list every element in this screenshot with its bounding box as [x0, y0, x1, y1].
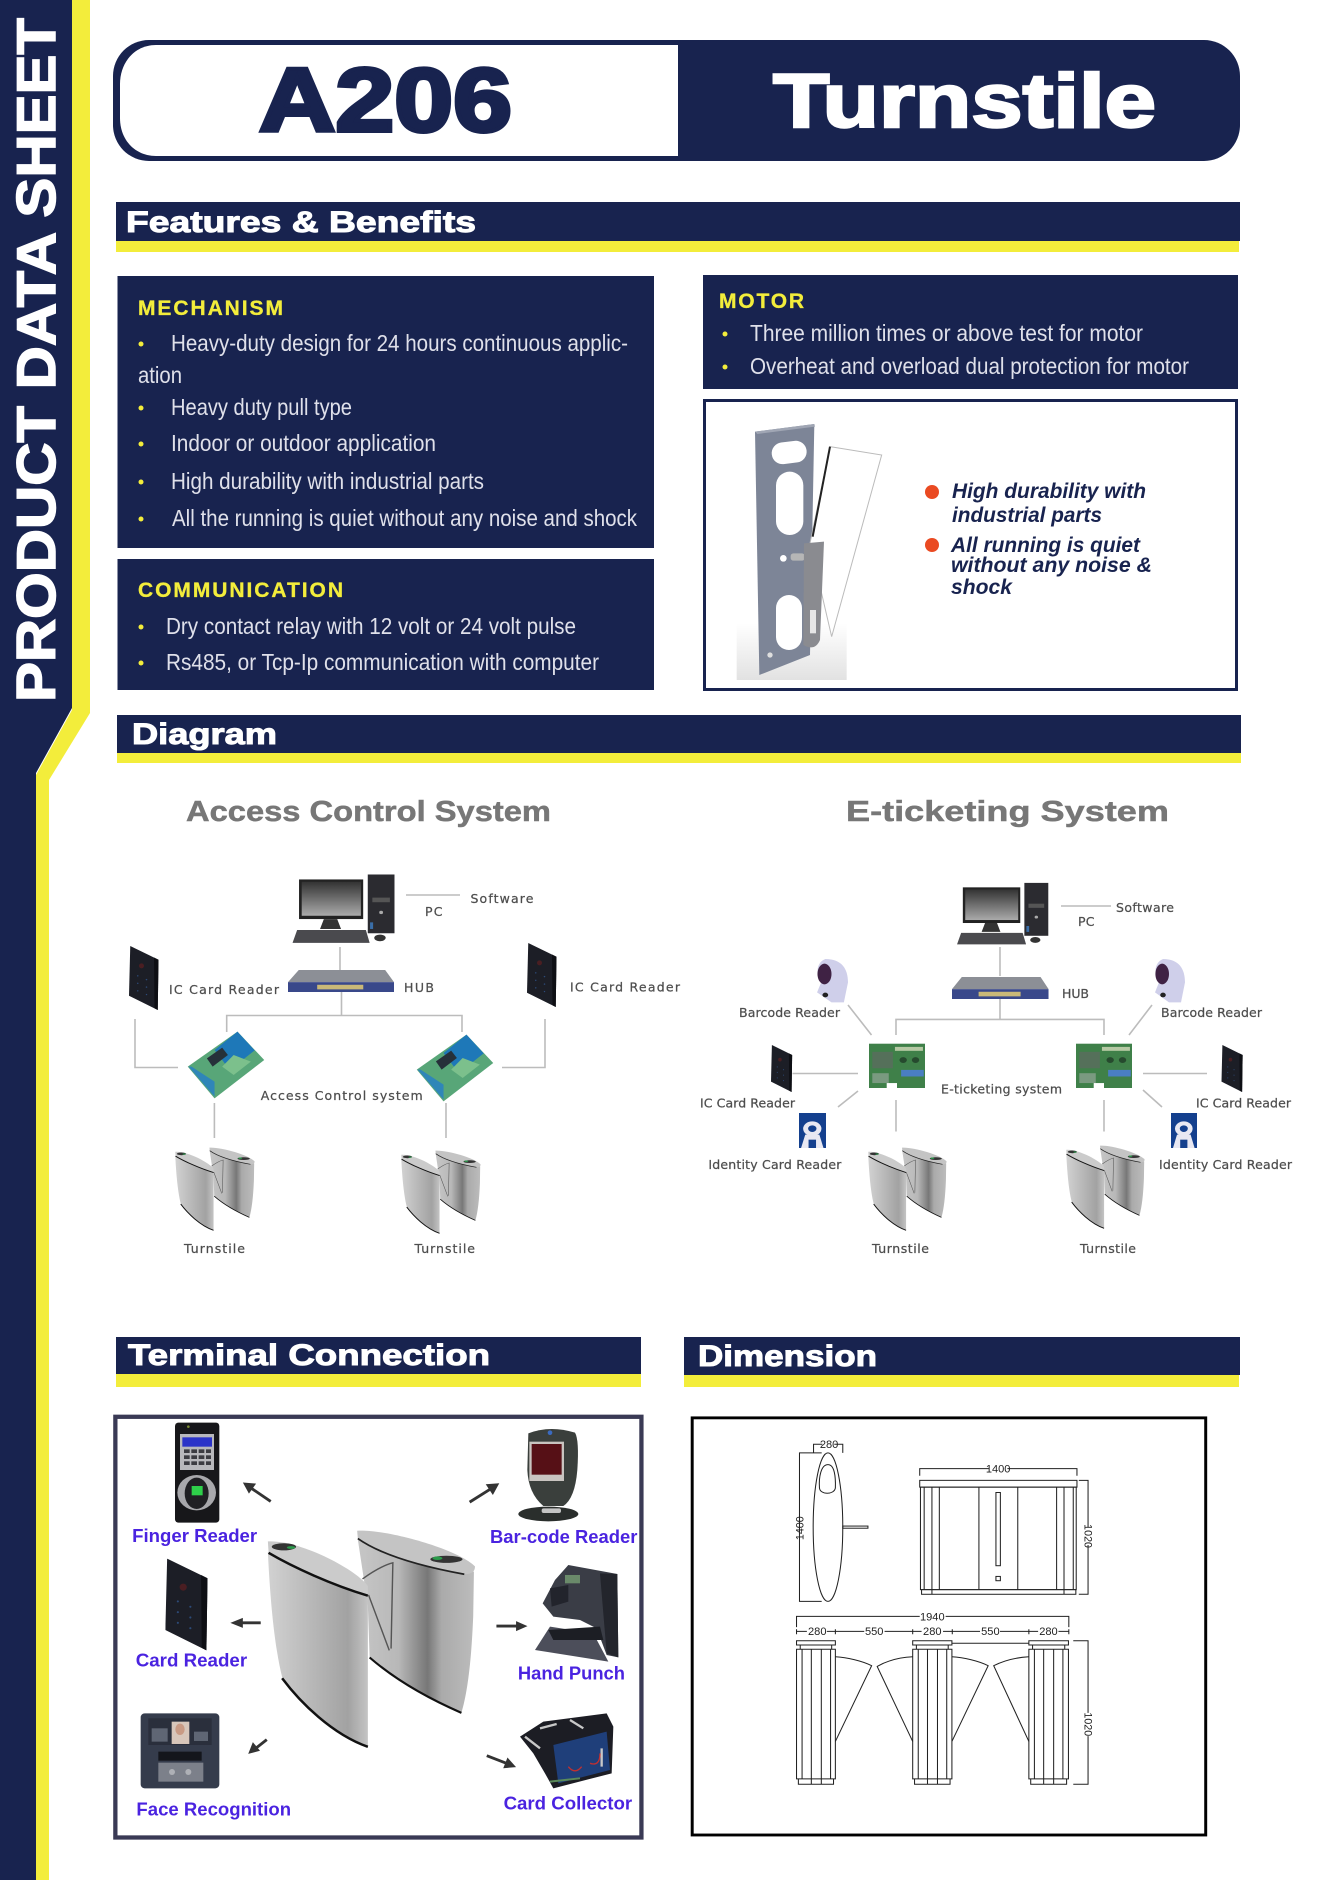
drawing: top view with gates: 280: [808, 1626, 826, 1638]
heading: diagram: [117, 715, 1241, 763]
panel: terminal connection: [115, 1417, 641, 1837]
panel: communication: [118, 559, 654, 690]
callout: durability and quiet: All running is quiet: [950, 534, 1141, 557]
panel: motor: [703, 275, 1238, 389]
title banner: [113, 40, 1240, 161]
arrow: to face recognition: [248, 1740, 267, 1754]
drawing: top view with gates: 550: [865, 1626, 883, 1638]
mechanism bullets: Heavy duty pull type: [171, 394, 352, 420]
icon: pc: [293, 874, 394, 943]
label: right turnstile: Turnstile: [1079, 1241, 1136, 1256]
communication bullets: Dry contact relay with 12 volt or 24 volt pulse: [166, 613, 576, 639]
icon: right turnstile: [1066, 1146, 1145, 1228]
label: barcode reader: Bar-code Reader: [490, 1527, 638, 1548]
diagram: access control system: [129, 796, 681, 1256]
icon: hand punch: [535, 1565, 618, 1662]
label: card reader: Card Reader: [136, 1650, 248, 1671]
icon: central turnstile: [268, 1531, 475, 1747]
icon: right turnstile: [401, 1151, 481, 1233]
arrow: to card collector: [487, 1756, 516, 1768]
icon: right controller board: [417, 1035, 493, 1101]
label: access control system: Access Control system: [261, 1088, 423, 1103]
label: software: Software: [470, 891, 534, 906]
connecting lines: [135, 895, 545, 1138]
mechanism bullets: All the running is quiet without any noise and shock: [172, 505, 637, 531]
communication bullets: Rs485, or Tcp-Ip communication with computer: [166, 649, 599, 675]
heading: dimension: Dimension: [698, 1340, 877, 1373]
label: card collector: Card Collector: [504, 1793, 633, 1814]
communication heading: COMMUNICATION: [138, 579, 343, 602]
drawing: side view: 1400: [794, 1516, 807, 1540]
diagram: e-ticketing system: [700, 796, 1293, 1256]
label: software: Software: [1116, 900, 1174, 915]
mechanism bullets: [138, 330, 637, 531]
panel: mechanism: [118, 276, 654, 548]
motor bullets: [722, 320, 1189, 379]
icon: left ticketing board: [869, 1044, 925, 1088]
icon: face recognition: [141, 1713, 219, 1788]
motor bullets: Overheat and overload dual protection for motor: [750, 353, 1189, 379]
label: pc: PC: [1078, 914, 1095, 929]
arrow: to card reader: [230, 1618, 261, 1628]
icon: right ticketing board: [1076, 1044, 1132, 1088]
label: right identity reader: Identity Card Reader: [1159, 1157, 1293, 1172]
sidebar: product data sheet: PRODUCT DATA SHEET: [5, 18, 67, 702]
arrow: to barcode reader: [470, 1483, 499, 1502]
panel: dimension drawings: [692, 1418, 1206, 1835]
communication bullets: [138, 613, 599, 675]
icon: right barcode reader: [1155, 959, 1185, 1002]
drawing: front view: 1020: [1081, 1524, 1094, 1548]
icon: left turnstile: [868, 1148, 947, 1230]
heading: features and benefits: [116, 202, 1240, 252]
access control title: Access Control System: [186, 796, 551, 828]
callout: durability and quiet: [925, 480, 1152, 599]
icon: left card reader: [129, 946, 158, 1010]
motor bullets: Three million times or above test for motor: [750, 320, 1143, 346]
mechanism bullets: Heavy-duty design for 24 hours continuous applic-: [171, 330, 628, 356]
label: hub: HUB: [404, 980, 434, 995]
label: right turnstile: Turnstile: [414, 1241, 475, 1256]
label: hand punch: Hand Punch: [518, 1664, 625, 1685]
icon: barcode reader: [518, 1429, 578, 1521]
motor heading: MOTOR: [719, 290, 804, 313]
label: right card reader: IC Card Reader: [1196, 1096, 1292, 1110]
icon: right identity reader: [1171, 1113, 1197, 1148]
icon: pc: [957, 883, 1048, 944]
drawing: side view: [794, 1439, 868, 1601]
icon: right card reader: [527, 943, 556, 1007]
drawing: side view: 280: [820, 1439, 838, 1451]
mechanism bullets: High durability with industrial parts: [171, 468, 484, 494]
heading: features and benefits: Features & Benefits: [126, 206, 476, 239]
icon: left barcode reader: [817, 959, 848, 1002]
icon: hub: [288, 970, 394, 992]
mechanism bullets: ation: [138, 362, 182, 388]
label: left turnstile: Turnstile: [871, 1241, 929, 1256]
label: left turnstile: Turnstile: [183, 1241, 245, 1256]
label: left card reader: IC Card Reader: [700, 1096, 796, 1110]
label: right card reader: IC Card Reader: [570, 980, 681, 994]
drawing: top view with gates: 1020: [1081, 1712, 1094, 1736]
mechanism bullets: Indoor or outdoor application: [171, 430, 436, 456]
connecting lines: [792, 906, 1207, 1132]
label: pc: PC: [425, 904, 443, 919]
icon: left turnstile: [175, 1148, 255, 1230]
icon: left controller board: [188, 1032, 264, 1098]
drawing: top view with gates: 550: [981, 1626, 1000, 1638]
drawing: top view with gates: [797, 1612, 1094, 1784]
callout: durability and quiet: industrial parts: [952, 504, 1102, 527]
panel: wing bracket image: [704, 400, 1236, 690]
callout: durability and quiet: without any noise &: [951, 554, 1152, 577]
heading: terminal connection: [116, 1337, 641, 1387]
icon: finger reader: [175, 1423, 219, 1523]
label: left identity reader: Identity Card Reader: [708, 1157, 842, 1172]
label: hub: HUB: [1062, 986, 1089, 1001]
label: finger reader: Finger Reader: [132, 1526, 258, 1547]
callout: durability and quiet: shock: [951, 576, 1013, 599]
title banner: A206: [259, 51, 512, 151]
drawing: top view with gates: 1940: [920, 1612, 945, 1623]
e-ticketing title: E-ticketing System: [846, 796, 1169, 828]
heading: diagram: Diagram: [132, 718, 277, 751]
label: e-ticketing system: E-ticketing system: [941, 1082, 1062, 1096]
sidebar: product data sheet: [0, 0, 90, 1880]
arrow: to finger reader: [243, 1482, 271, 1501]
icon: card reader: [165, 1559, 207, 1650]
label: face recognition: Face Recognition: [136, 1800, 291, 1821]
drawing: top view with gates: 280: [923, 1626, 942, 1638]
icon: left card reader: [771, 1045, 792, 1092]
title banner: Turnstile: [773, 59, 1156, 144]
drawing: front view: 1400: [986, 1464, 1010, 1475]
icon: bracket and glass wing: [737, 424, 882, 680]
icon: hub: [952, 977, 1049, 999]
label: left card reader: IC Card Reader: [169, 982, 280, 997]
icon: right card reader: [1222, 1045, 1243, 1092]
icon: left identity reader: [799, 1113, 826, 1148]
icon: card collector: [520, 1713, 613, 1788]
label: right barcode reader: Barcode Reader: [1161, 1005, 1263, 1020]
drawing: top view with gates: 280: [1039, 1626, 1058, 1638]
arrow: to hand punch: [496, 1621, 527, 1631]
label: left barcode reader: Barcode Reader: [739, 1005, 841, 1020]
heading: terminal connection: Terminal Connection: [128, 1339, 490, 1372]
mechanism heading: MECHANISM: [138, 297, 283, 320]
drawing: front view: [920, 1464, 1094, 1594]
heading: dimension: [684, 1337, 1240, 1387]
callout: durability and quiet: High durability with: [952, 480, 1146, 503]
